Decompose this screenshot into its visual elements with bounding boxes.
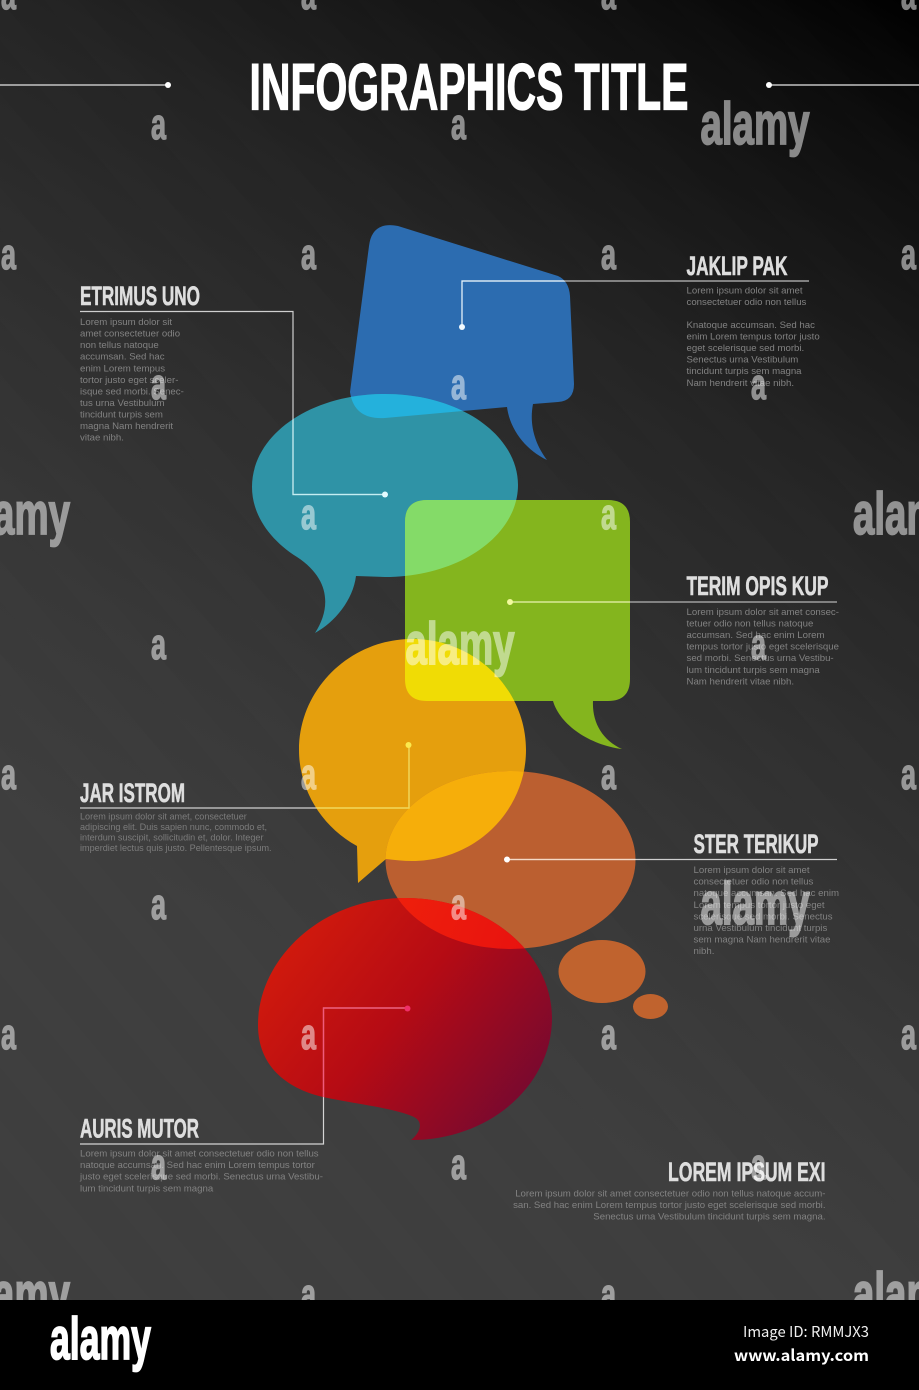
watermarks: alamy bbox=[406, 611, 515, 677]
body: tincidunt turpis sem magna bbox=[686, 366, 802, 377]
watermarks: a bbox=[151, 100, 166, 149]
body: vitae nibh. bbox=[80, 433, 124, 444]
heading: STER TERIKUP bbox=[694, 829, 818, 859]
body: tus urna Vestibulum bbox=[80, 398, 165, 409]
watermarks: a bbox=[601, 750, 616, 799]
body: sed morbi. Senectus urna Vestibu- bbox=[686, 653, 834, 664]
body: eget scelerisque sed morbi. bbox=[686, 343, 804, 354]
text block: Etrimus Uno bbox=[80, 281, 200, 444]
watermarks: alamy bbox=[700, 91, 810, 157]
body: Nam hendrerit vitae nibh. bbox=[686, 378, 794, 389]
watermarks: a bbox=[151, 1140, 166, 1189]
bubble: red bbox=[258, 898, 552, 1140]
body: non tellus natoque bbox=[80, 340, 159, 351]
body: isque sed morbi. Senec- bbox=[80, 386, 184, 397]
heading: JAKLIP PAK bbox=[686, 251, 788, 281]
watermarks: a bbox=[301, 230, 316, 279]
watermarks: a bbox=[151, 880, 166, 929]
bubble: brown thought bbox=[386, 771, 668, 1019]
connector: Terim Opis Kup bbox=[507, 599, 837, 605]
body bbox=[80, 317, 184, 444]
body bbox=[513, 1188, 826, 1223]
body: Lorem ipsum dolor sit amet, consectetuer bbox=[80, 811, 247, 821]
text block: Terim Opis Kup bbox=[686, 571, 839, 687]
watermarks: a bbox=[751, 1140, 766, 1189]
connector: Etrimus Uno bbox=[80, 312, 388, 498]
watermarks: a bbox=[451, 1140, 466, 1189]
body: Lorem ipsum dolor sit bbox=[80, 317, 172, 328]
watermarks: a bbox=[751, 620, 766, 669]
body: san. Sed hac enim Lorem tempus tortor justo eget scelerisque sed morbi. bbox=[513, 1200, 826, 1211]
body: tortor justo eget sceler- bbox=[80, 375, 178, 386]
body: Lorem ipsum dolor sit amet bbox=[686, 286, 803, 296]
text block: Lorem Ipsum Exi bbox=[513, 1157, 826, 1223]
connector: Jaklip Pak bbox=[459, 281, 809, 330]
overlap: orange and brown bbox=[386, 771, 524, 861]
overlap: blue and teal bbox=[351, 394, 462, 418]
body: enim Lorem tempus bbox=[80, 363, 165, 374]
body: tetuer odio non tellus natoque bbox=[686, 619, 813, 630]
body: amet consectetuer odio bbox=[80, 329, 180, 340]
body: imperdiet lectus quis justo. Pellentesque ipsum. bbox=[80, 843, 272, 853]
connector: Jar Istrom bbox=[80, 742, 412, 808]
body: Knatoque accumsan. Sed hac bbox=[686, 320, 815, 331]
body: Senectus urna Vestibulum tincidunt turpis sem magna. bbox=[593, 1212, 826, 1223]
body: tempus tortor justo eget scelerisque bbox=[686, 642, 839, 653]
watermarks: alamy bbox=[700, 871, 810, 937]
footer band bbox=[0, 1300, 919, 1390]
watermarks: a bbox=[451, 100, 466, 149]
website: www.alamy.com bbox=[734, 1344, 869, 1366]
heading: TERIM OPIS KUP bbox=[686, 571, 828, 601]
text block: Jaklip Pak bbox=[686, 251, 820, 389]
connector: Auris Mutor bbox=[80, 1006, 410, 1144]
overlap: green and orange bbox=[405, 639, 514, 701]
body: accumsan. Sed hac enim Lorem bbox=[686, 630, 825, 641]
body bbox=[80, 811, 272, 853]
body bbox=[79, 1148, 323, 1194]
bubble: green bbox=[405, 500, 630, 749]
body: accumsan. Sed hac bbox=[80, 352, 165, 363]
watermarks: a bbox=[601, 1270, 616, 1319]
body: Lorem ipsum dolor sit amet consectetuer odio non tellus natoque accum- bbox=[515, 1188, 826, 1200]
watermarks: a bbox=[601, 230, 616, 279]
body: nibh. bbox=[694, 946, 714, 957]
body: Lorem tempus tortor justo eget bbox=[694, 900, 825, 911]
body: adipiscing elit. Duis sapien nunc, commodo et, bbox=[80, 822, 267, 832]
text block: Auris Mutor bbox=[79, 1113, 323, 1194]
body: interdum suscipit, sollicitudin et, dolor. Integer bbox=[80, 832, 263, 842]
watermarks: a bbox=[601, 490, 616, 539]
body: Lorem ipsum dolor sit amet consec- bbox=[686, 607, 839, 618]
watermarks: a bbox=[301, 750, 316, 799]
text block: Ster Terikup bbox=[694, 829, 839, 957]
title rule right bbox=[766, 82, 919, 88]
body: natoque accumsan. Sed hac enim bbox=[694, 888, 839, 899]
body: consectetuer odio non tellus bbox=[686, 297, 807, 308]
body bbox=[686, 286, 820, 389]
watermarks: a bbox=[151, 620, 166, 669]
body: consectetuer odio non tellus bbox=[694, 877, 814, 888]
body: natoque accumsan. Sed hac enim Lorem tempus tortor bbox=[80, 1160, 316, 1171]
heading: ETRIMUS UNO bbox=[80, 281, 200, 311]
body: Lorem ipsum dolor sit amet consectetuer odio non tellus bbox=[80, 1148, 319, 1160]
watermarks: a bbox=[301, 1010, 316, 1059]
watermarks: a bbox=[151, 360, 166, 409]
body: urna Vestibulum tincidunt turpis bbox=[694, 923, 827, 934]
body: scelerisque sed morbi. Senectus bbox=[694, 911, 833, 922]
body: tincidunt turpis sem bbox=[80, 410, 163, 421]
body: sem magna Nam hendrerit vitae bbox=[694, 934, 830, 946]
speech bubbles bbox=[252, 225, 668, 1140]
heading: JAR ISTROM bbox=[80, 778, 185, 808]
watermarks: a bbox=[1, 230, 16, 279]
body: lum tincidunt turpis sem magna bbox=[686, 665, 820, 676]
body bbox=[686, 607, 839, 687]
body: Lorem ipsum dolor sit amet bbox=[694, 865, 810, 876]
bubble: blue bbox=[350, 225, 574, 460]
overlap: brown and red bbox=[398, 898, 524, 949]
bubble: orange bbox=[299, 639, 526, 883]
watermarks: a bbox=[301, 1270, 316, 1319]
bubble: teal bbox=[252, 394, 518, 633]
body bbox=[694, 865, 839, 957]
body: Nam hendrerit vitae nibh. bbox=[686, 676, 794, 687]
heading: LOREM IPSUM EXI bbox=[668, 1157, 826, 1187]
overlap: teal and green bbox=[405, 500, 516, 576]
body: magna Nam hendrerit bbox=[80, 421, 173, 432]
watermarks: a bbox=[751, 360, 766, 409]
watermarks: a bbox=[301, 490, 316, 539]
watermarks: a bbox=[451, 360, 466, 409]
body: justo eget scelerisque sed morbi. Senectus urna Vestibu- bbox=[79, 1172, 323, 1183]
connector: Ster Terikup bbox=[504, 856, 837, 862]
title rule left bbox=[0, 82, 171, 88]
text block: Jar Istrom bbox=[80, 778, 272, 853]
watermarks: a bbox=[1, 1010, 16, 1059]
footer logo: alamy bbox=[50, 1306, 151, 1372]
image id: Image ID: RMMJX3 bbox=[743, 1321, 869, 1342]
watermarks: a bbox=[451, 880, 466, 929]
heading: AURIS MUTOR bbox=[80, 1113, 199, 1143]
watermarks: a bbox=[1, 750, 16, 799]
body: enim Lorem tempus tortor justo bbox=[686, 332, 820, 342]
body: lum tincidunt turpis sem magna bbox=[80, 1183, 214, 1194]
body: Senectus urna Vestibulum bbox=[686, 355, 798, 366]
watermarks: a bbox=[601, 1010, 616, 1059]
